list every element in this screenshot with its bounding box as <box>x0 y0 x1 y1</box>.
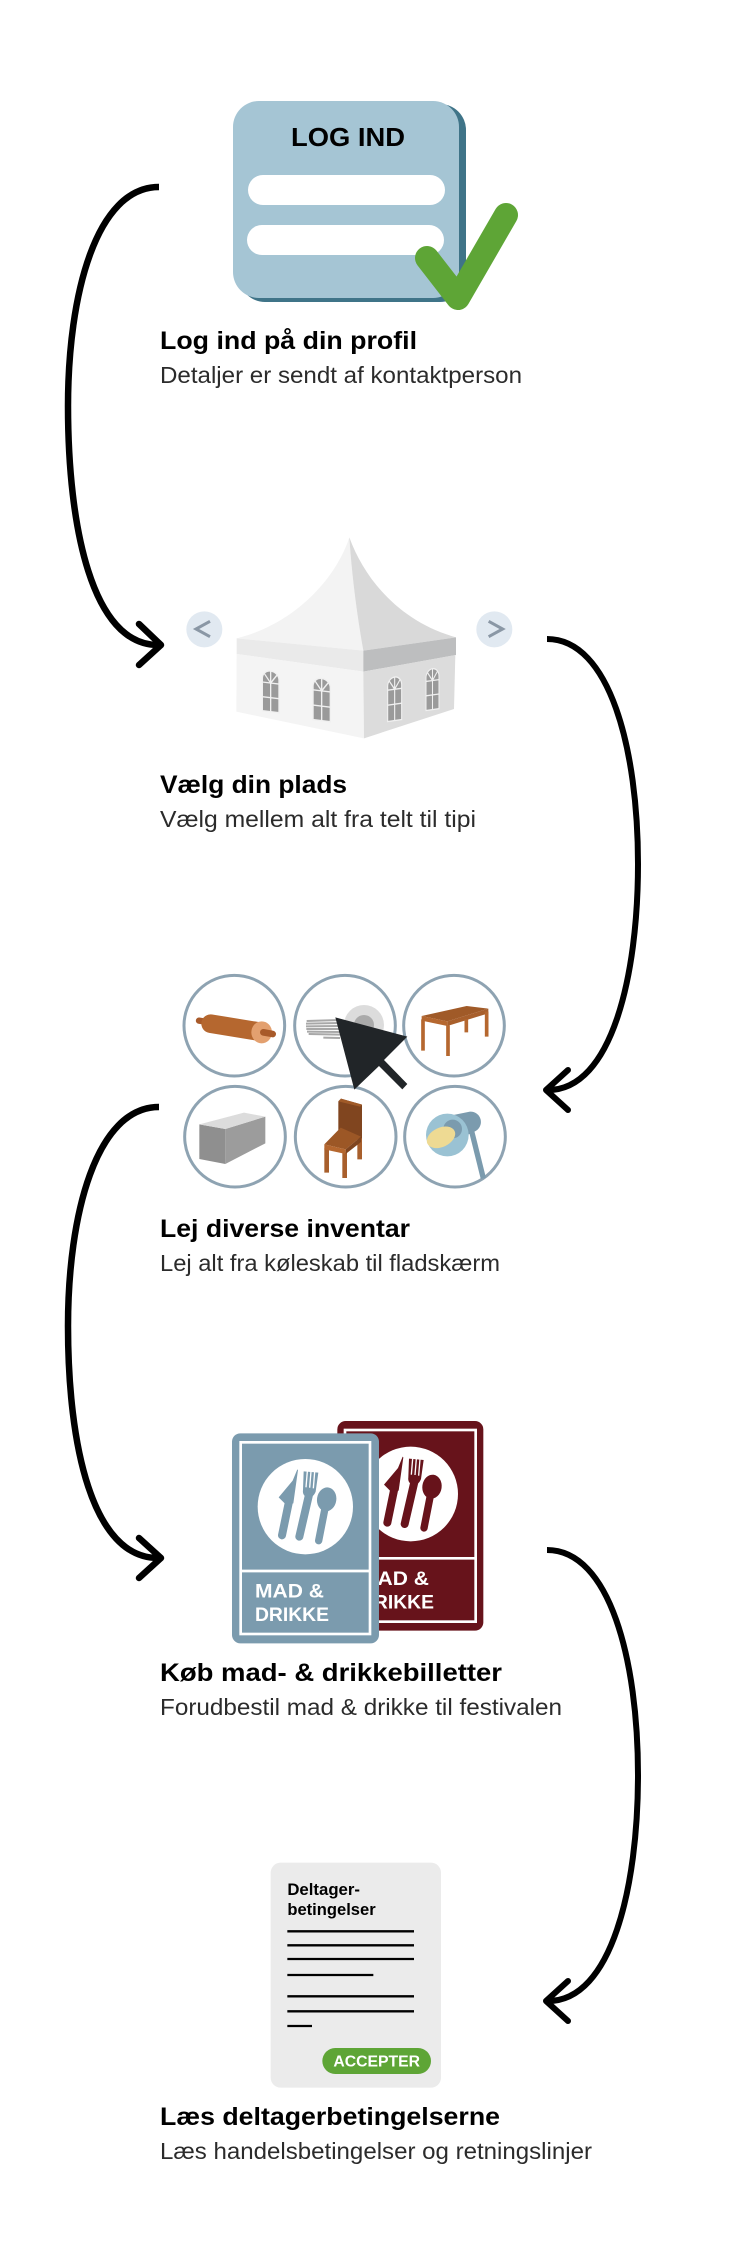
arrow: step 3 to step 4 <box>68 1107 161 1578</box>
document text lines <box>287 1931 414 2026</box>
text: step 3: Lej alt fra køleskab til fladskærm <box>160 1250 500 1276</box>
text: step 1: Detaljer er sendt af kontaktperson <box>160 362 522 388</box>
arrow: step 1 to step 2 <box>68 187 161 665</box>
heading: step 1: Log ind på din profil <box>160 327 417 355</box>
ticket: blue: MAD & <box>255 1581 324 1602</box>
ticket: red: MAD & <box>360 1569 429 1590</box>
text: step 5: Læs handelsbetingelser og retningslinjer <box>160 2138 592 2164</box>
window 4 <box>426 668 439 710</box>
arrow: step 4 to step 5 <box>546 1550 638 2021</box>
ticket: red <box>337 1421 483 1631</box>
text: step 2: Vælg mellem alt fra telt til tipi <box>160 806 476 832</box>
circle: table <box>404 975 504 1076</box>
document title: Deltager- <box>287 1880 360 1899</box>
heading: step 4: Køb mad- & drikkebilletter <box>160 1659 502 1687</box>
document title <box>287 1880 376 1919</box>
ticket: blue <box>232 1433 379 1643</box>
heading: step 2: Vælg din plads <box>160 771 347 799</box>
ticket: red: DRIKKE <box>360 1593 434 1614</box>
arrow: step 2 to step 3 <box>546 639 638 1110</box>
icon group: inventory circles <box>184 975 505 1187</box>
input field 1 <box>248 175 445 205</box>
accept button <box>322 2048 431 2074</box>
icon: login card <box>233 101 506 302</box>
circle: chair <box>295 1086 396 1187</box>
icon: mouse cursor <box>335 1017 407 1090</box>
accept button: ACCEPTER <box>333 2054 420 2071</box>
window 3 <box>388 676 402 722</box>
icon: food and drink tickets <box>232 1421 483 1643</box>
ticket: blue: DRIKKE <box>255 1605 329 1626</box>
input field 2 <box>247 225 444 255</box>
circle: plates <box>295 975 395 1076</box>
carousel button right <box>476 611 512 647</box>
heading: step 5: Læs deltagerbetingelserne <box>160 2103 500 2131</box>
circle: rolling pin <box>184 975 285 1076</box>
window 1 <box>262 670 279 713</box>
window 2 <box>313 677 330 722</box>
carousel button left <box>186 611 222 647</box>
login heading: LOG IND <box>291 122 405 152</box>
heading: step 3: Lej diverse inventar <box>160 1215 410 1243</box>
icon: green check mark <box>427 215 506 298</box>
icon: terms document <box>271 1863 441 2088</box>
document title: betingelser <box>287 1900 376 1919</box>
circle: concrete block <box>185 1086 285 1187</box>
text: step 4: Forudbestil mad & drikke til festivalen <box>160 1694 562 1720</box>
icon: tent <box>186 537 512 738</box>
circle: lamp <box>405 1086 505 1187</box>
